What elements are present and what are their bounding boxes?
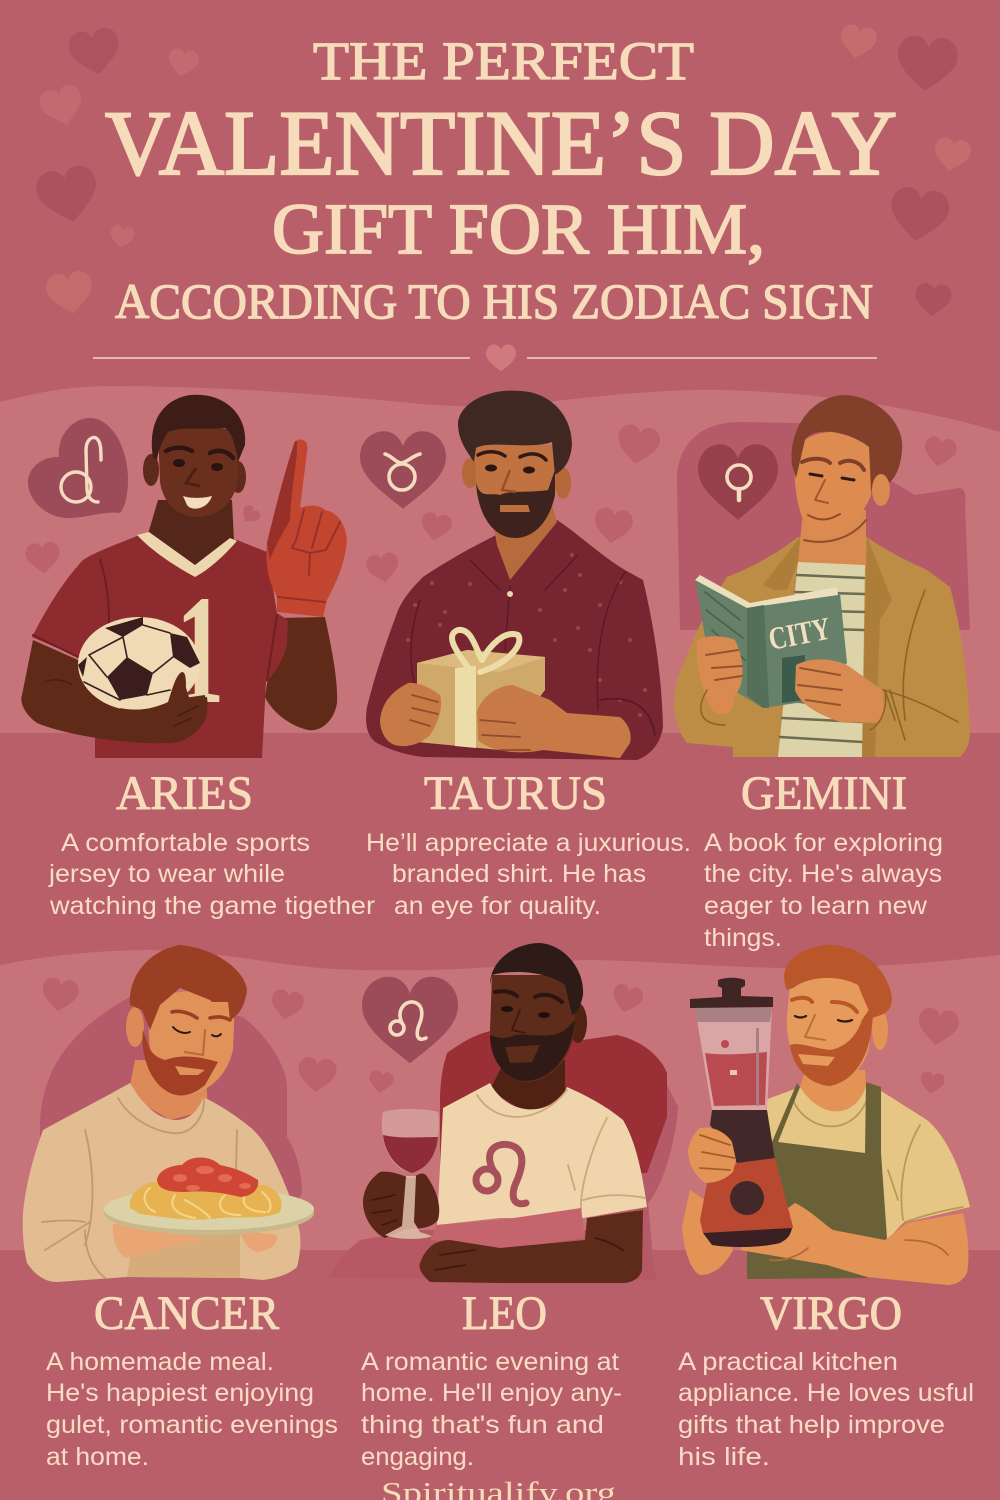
sauce xyxy=(157,1158,258,1197)
figure: leo man with wine xyxy=(330,943,657,1283)
description: taurus: He’ll appreciate a juxurious. xyxy=(366,829,691,857)
description: aries: A comfortable sports xyxy=(61,829,310,857)
zodiac heart: aries xyxy=(28,418,128,518)
hands xyxy=(380,683,441,746)
description: leo: home. He'll enjoy any- xyxy=(361,1379,622,1407)
description: aries: watching the game tigether xyxy=(49,892,375,920)
neck xyxy=(128,1060,208,1120)
neck xyxy=(798,510,866,566)
head xyxy=(569,1003,587,1043)
zodiac heart: leo xyxy=(362,977,458,1063)
description: gemini: the city. He's always xyxy=(704,860,942,888)
description: leo xyxy=(361,1348,622,1471)
striped tee xyxy=(778,562,865,757)
figure: aries man with jersey, ball and foam finger xyxy=(21,395,347,758)
description: aries xyxy=(48,829,375,920)
figure: taurus man with shirt and gift xyxy=(366,391,663,760)
blender xyxy=(690,978,773,1008)
blanket xyxy=(330,1230,657,1280)
hand on blender xyxy=(688,1127,736,1183)
neck xyxy=(490,1060,565,1115)
sign name: taurus: TAURUS xyxy=(424,767,607,820)
collar xyxy=(137,532,237,577)
description: cancer: gulet, romantic evenings xyxy=(46,1411,338,1439)
description: virgo: appliance. He loves usful xyxy=(678,1379,974,1407)
head xyxy=(126,1007,144,1047)
title: GIFT FOR HIM, xyxy=(272,189,765,269)
description: gemini: A book for exploring xyxy=(704,829,943,857)
description: leo: thing that's fun and xyxy=(361,1411,604,1439)
arm xyxy=(419,1210,643,1283)
neck and head xyxy=(490,505,557,580)
blanket fold xyxy=(430,1208,585,1250)
hands and plate xyxy=(113,1223,277,1258)
foam finger xyxy=(266,440,347,617)
sign name: gemini: GEMINI xyxy=(741,767,907,820)
gift box xyxy=(417,650,545,750)
divider with heart xyxy=(93,344,877,372)
pillow: cancer xyxy=(40,997,302,1240)
sign name: aries: ARIES xyxy=(116,767,253,820)
jacket xyxy=(674,537,970,757)
figure: virgo man with blender xyxy=(682,945,970,1285)
description: virgo xyxy=(678,1348,974,1471)
description: gemini: things. xyxy=(704,924,782,952)
tee xyxy=(437,1083,647,1225)
figure: cancer man with spaghetti xyxy=(23,945,314,1282)
hands xyxy=(697,636,742,714)
jersey xyxy=(32,536,288,758)
title: ACCORDING TO HIS ZODIAC SIGN xyxy=(115,273,873,329)
sign name: cancer: CANCER xyxy=(94,1287,279,1340)
jacket lapels xyxy=(763,537,892,757)
background band: second row xyxy=(0,950,1000,1250)
pillows: leo xyxy=(440,1030,678,1280)
soccer ball xyxy=(78,617,200,711)
wine glass xyxy=(382,1109,439,1173)
description: aries: jersey to wear while xyxy=(48,860,285,888)
description: leo: A romantic evening at xyxy=(361,1348,619,1376)
pillows: gemini xyxy=(677,422,970,630)
spaghetti xyxy=(130,1182,282,1220)
hand holding glass xyxy=(363,1172,439,1238)
description: cancer: at home. xyxy=(46,1443,149,1471)
zodiac heart: taurus xyxy=(360,431,446,509)
shirt xyxy=(366,520,663,760)
description: cancer: A homemade meal. xyxy=(46,1348,274,1376)
description: cancer: He's happiest enjoying xyxy=(46,1379,314,1407)
book xyxy=(695,578,847,708)
title xyxy=(105,31,897,329)
arm and hand xyxy=(740,1203,968,1285)
zodiac heart: gemini xyxy=(698,444,778,520)
tee xyxy=(765,1082,970,1240)
title: THE PERFECT xyxy=(313,31,694,91)
description: gemini: eager to learn new xyxy=(704,892,928,920)
small hearts: first row xyxy=(25,423,958,585)
title: VALENTINE’S DAY xyxy=(105,92,897,194)
sign name: virgo: VIRGO xyxy=(760,1287,902,1340)
description: taurus: branded shirt. He has xyxy=(392,860,646,888)
neck xyxy=(795,1070,868,1120)
figure: gemini man reading a city book xyxy=(674,395,970,757)
figure: gemini man reading a city book: CITY xyxy=(765,610,833,657)
apron xyxy=(747,1082,887,1279)
hand on ball xyxy=(120,672,208,738)
description: cancer xyxy=(46,1348,338,1471)
description: taurus xyxy=(366,829,691,920)
background band: first row xyxy=(0,386,1000,733)
head xyxy=(872,1010,888,1050)
sweater xyxy=(23,1083,300,1282)
left arm xyxy=(21,640,207,743)
number: 1 xyxy=(176,564,224,737)
head xyxy=(794,432,871,538)
description: leo: engaging. xyxy=(361,1443,474,1471)
description: virgo: his life. xyxy=(678,1443,770,1471)
description: virgo: gifts that help improve xyxy=(678,1411,945,1439)
right arm xyxy=(265,617,337,730)
decorative background hearts xyxy=(33,23,973,318)
sign name: leo: LEO xyxy=(462,1287,547,1340)
small hearts: second row xyxy=(40,976,960,1096)
description: virgo: A practical kitchen xyxy=(678,1348,898,1376)
description: gemini xyxy=(704,829,943,952)
leo emblem xyxy=(476,1144,526,1204)
description: taurus: an eye for quality. xyxy=(394,892,601,920)
neck and head xyxy=(148,500,234,572)
